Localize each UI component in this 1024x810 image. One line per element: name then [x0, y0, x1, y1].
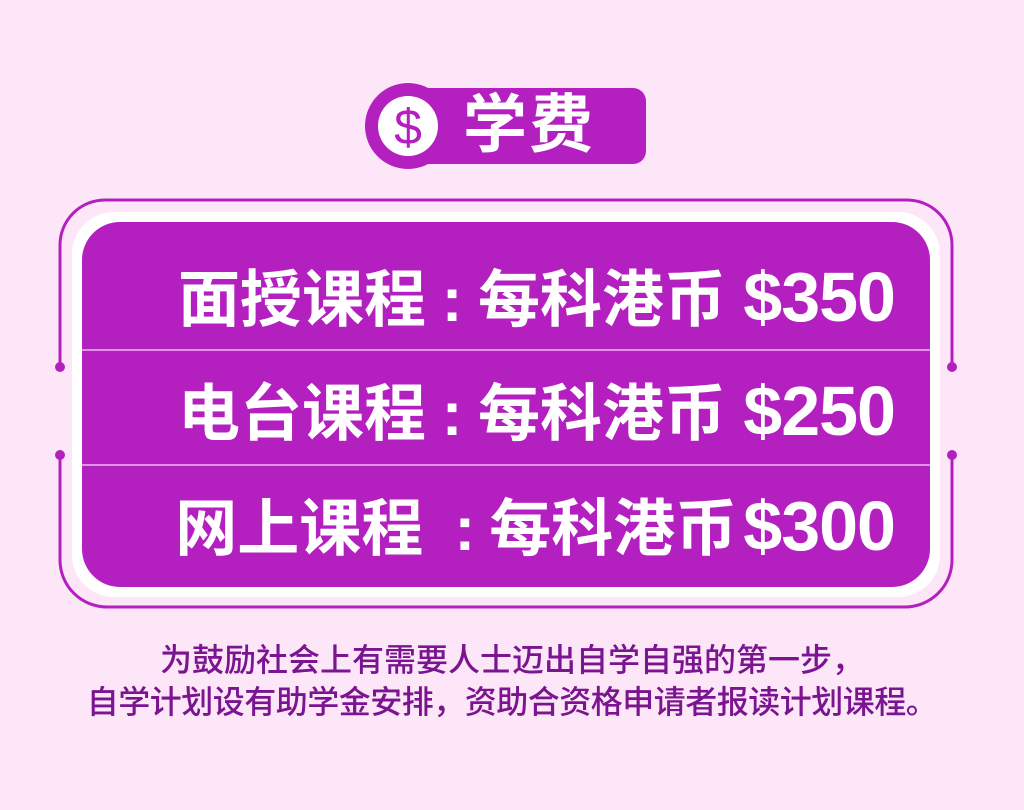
- title badge: $: [394, 99, 422, 155]
- footer text: 自学计划设有助学金安排，资助合资格申请者报读计划课程。: [87, 684, 937, 720]
- title text: 学费: [463, 89, 595, 161]
- row: online: 网上课程 每科港币$300: [175, 487, 895, 565]
- footer text: 为鼓励社会上有需要人士迈出自学自强的第一步，: [160, 642, 864, 678]
- row: face-to-face: 面授课程 每科港币 $350: [178, 258, 895, 336]
- row: online: :: [455, 495, 475, 564]
- row: face-to-face: :: [442, 266, 462, 335]
- row: radio: 电台课程 每科港币 $250: [178, 372, 895, 450]
- row: radio: :: [442, 380, 462, 449]
- footer text: [87, 642, 937, 720]
- title badge: [365, 83, 646, 169]
